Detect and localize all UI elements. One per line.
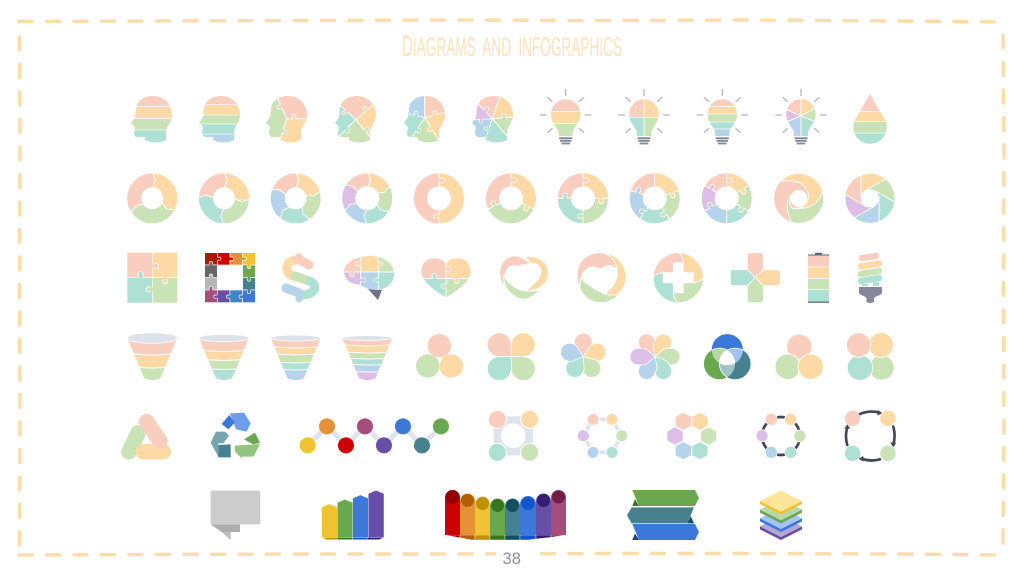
icon: bulb in five bands	[697, 89, 748, 144]
icon: puzzle ring four pieces	[557, 172, 609, 224]
icon: twelve-piece puzzle frame	[205, 253, 255, 303]
icon: funnel four levels	[200, 334, 248, 380]
icon: four petals	[487, 333, 535, 381]
row 1: heads, bulbs and drop	[131, 89, 887, 144]
icon: aperture disc	[841, 172, 899, 224]
icon: layer stack	[760, 491, 802, 540]
icon: bulb in four quarters	[618, 89, 670, 144]
row 3: puzzle and shape icons	[127, 252, 882, 304]
icon: swirl disc	[774, 173, 824, 223]
icon: gray speech ribbon	[211, 491, 260, 540]
icon: head in six puzzle pieces	[472, 96, 513, 142]
icon: bulb in six sectors	[775, 89, 827, 144]
icon: four-arm plus	[730, 253, 780, 303]
icon: three circles	[416, 334, 463, 378]
icon: head in four puzzle pieces	[335, 96, 376, 142]
icon: puzzle ring five pieces	[629, 172, 681, 224]
icon: triangle of capsules	[129, 422, 163, 452]
icon: ring three arrows	[128, 172, 177, 223]
icon: six nodes with dark links	[756, 413, 806, 459]
icon: heart in swirl circle	[577, 253, 626, 303]
icon: ring four arrows	[198, 172, 250, 224]
icon: interlocked four circles	[846, 332, 894, 381]
page number	[496, 549, 530, 568]
icon: funnel six levels	[342, 336, 392, 380]
icon: interlocked three circles	[775, 334, 823, 379]
icon: medical cross in circle	[653, 253, 703, 303]
icon: connected node chain	[300, 418, 449, 453]
icon: puzzle ring three pieces	[485, 172, 536, 223]
row 6: three-dimensional shapes	[211, 490, 802, 540]
icon: four nodes with cycle arrows	[844, 410, 896, 462]
icon: ring five arrows	[270, 172, 321, 224]
icon: ring six arrows	[342, 172, 393, 224]
icon: head in five puzzle pieces	[404, 96, 445, 142]
icon: funnel three levels	[128, 333, 177, 380]
icon: six petals	[630, 331, 680, 383]
icon: funnel five levels	[271, 336, 320, 380]
icon: four nodes ring	[488, 410, 539, 461]
title: DIAGRAMS AND INFOGRAPHICS	[402, 30, 622, 63]
icon: water drop in four bands	[853, 94, 887, 144]
icon: six nodes ring	[577, 413, 628, 458]
icon: puzzle heart	[422, 258, 470, 297]
icon: brain puzzle	[344, 256, 394, 300]
icon: rising arrow bars	[322, 490, 384, 540]
icon: head in three puzzle pieces	[266, 96, 307, 142]
icon: four-piece puzzle square	[127, 253, 177, 303]
icon: six hexagons	[667, 412, 717, 460]
icon: rounded columns	[445, 490, 566, 540]
icon: battery	[808, 253, 829, 303]
icon: Venn diagram	[704, 334, 751, 379]
icon: head in four bands	[131, 96, 172, 142]
icon: spiral light bulb	[859, 256, 882, 303]
row 5: cycles and connected nodes	[129, 410, 896, 462]
icon: five petals	[558, 333, 608, 381]
icon: swirl heart	[500, 256, 548, 299]
icon: dollar sign	[286, 256, 315, 299]
row 4: funnels and clusters	[128, 333, 894, 380]
icon: bulb in three bands	[540, 89, 591, 144]
icon: head in five bands	[199, 96, 240, 142]
icon: recycle arrows	[211, 413, 260, 458]
icon: puzzle ring six pieces	[701, 172, 752, 224]
row 2: ring segment diagrams	[128, 172, 899, 224]
page number: 38	[503, 550, 521, 568]
icon: puzzle ring two pieces	[420, 172, 458, 224]
icon: stacked chevron banners	[627, 490, 699, 540]
